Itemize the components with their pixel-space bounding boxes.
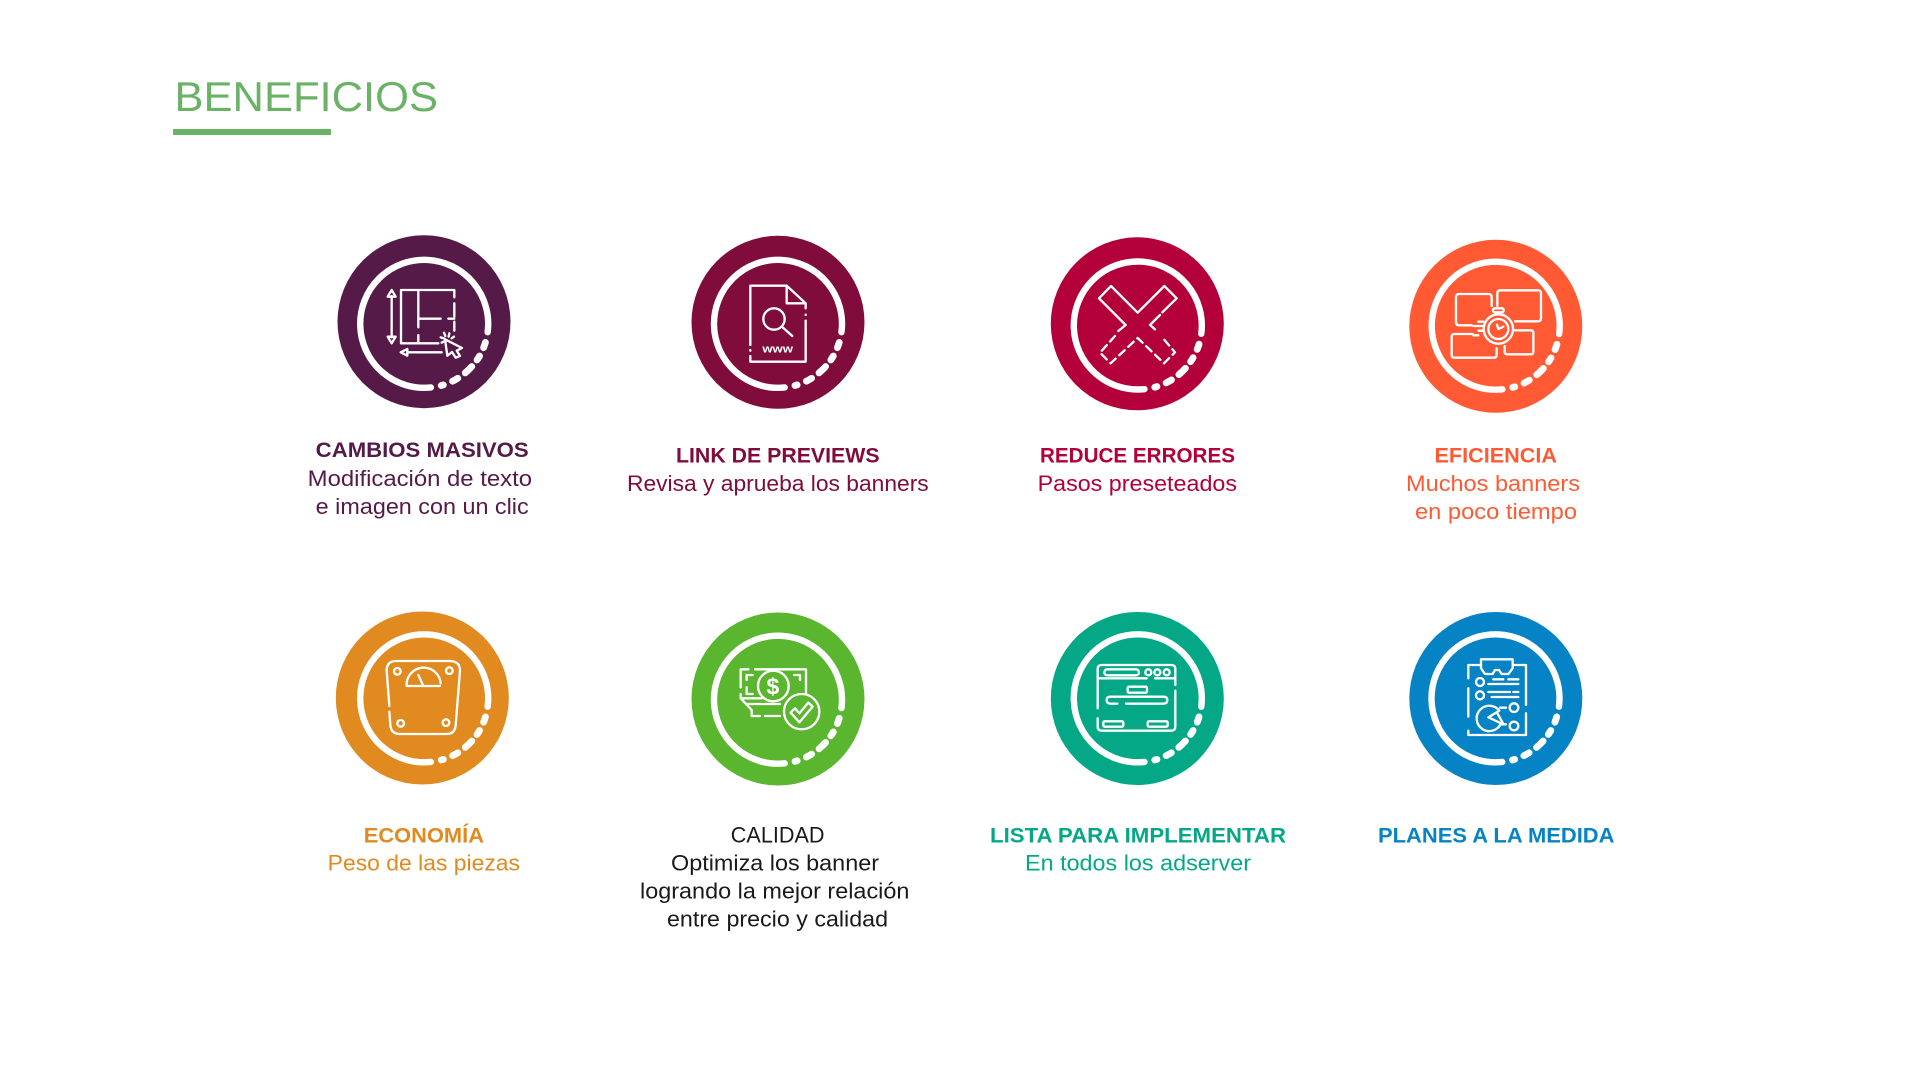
card: calidad <box>640 612 909 932</box>
description line 2: e imagen con un clic <box>316 494 529 519</box>
description line 1: Optimiza los banner <box>671 850 879 876</box>
progress ring <box>1074 634 1202 762</box>
card: lista para implementar <box>990 612 1286 876</box>
icon: banknotes with check <box>741 669 819 729</box>
icon: banknotes with check: $ <box>766 673 779 699</box>
badge circle <box>338 235 510 408</box>
icon: weighing scale <box>387 661 460 734</box>
title: BENEFICIOS <box>174 73 438 120</box>
badge circle <box>692 236 864 409</box>
badge circle <box>336 612 509 784</box>
progress ring <box>714 636 842 764</box>
card: eficiencia <box>1406 240 1582 524</box>
badge circle <box>1409 612 1582 785</box>
description line 3: entre precio y calidad <box>667 906 888 932</box>
description: En todos los adserver <box>1025 850 1251 876</box>
description line 1: Muchos banners <box>1406 471 1580 496</box>
icon: stopwatch with panels <box>1452 290 1541 358</box>
icon: half dashed cross <box>1099 286 1177 363</box>
description: Peso de las piezas <box>328 850 520 876</box>
progress ring <box>1432 262 1560 390</box>
heading: EFICIENCIA <box>1434 444 1557 468</box>
progress ring <box>714 260 842 388</box>
heading: LINK DE PREVIEWS <box>676 444 880 468</box>
description line 1: Modificación de texto <box>308 466 532 491</box>
card: link de previews <box>627 236 929 496</box>
progress ring <box>1074 262 1202 390</box>
progress ring <box>360 634 488 762</box>
heading: LISTA PARA IMPLEMENTAR <box>990 824 1286 848</box>
heading: CAMBIOS MASIVOS <box>316 439 529 462</box>
heading: ECONOMÍA <box>364 824 484 848</box>
card: cambios masivos <box>308 235 532 519</box>
icon: browser window <box>1098 665 1175 731</box>
heading: PLANES A LA MEDIDA <box>1378 824 1614 848</box>
card: economia <box>328 612 520 876</box>
icon: document with magnifier <box>750 286 806 362</box>
badge circle <box>1051 612 1224 785</box>
heading: CALIDAD <box>731 822 824 848</box>
icon: document with magnifier: www <box>761 344 793 356</box>
description: Revisa y aprueba los banners <box>627 471 929 496</box>
description line 2: logrando la mejor relación <box>640 878 909 904</box>
description line 2: en poco tiempo <box>1415 499 1577 524</box>
icon: clipboard with chart <box>1468 659 1526 735</box>
description: Pasos preseteados <box>1038 471 1237 496</box>
card: reduce errores <box>1038 237 1237 496</box>
heading: REDUCE ERRORES <box>1040 444 1235 468</box>
title underline <box>173 129 331 135</box>
badge circle <box>1409 240 1582 413</box>
badge circle <box>692 612 864 786</box>
progress ring <box>1431 634 1559 762</box>
badge circle <box>1051 237 1224 410</box>
icon: layout with resize arrows and cursor <box>388 290 462 358</box>
progress ring <box>360 260 488 388</box>
card: planes a la medida <box>1378 612 1614 848</box>
